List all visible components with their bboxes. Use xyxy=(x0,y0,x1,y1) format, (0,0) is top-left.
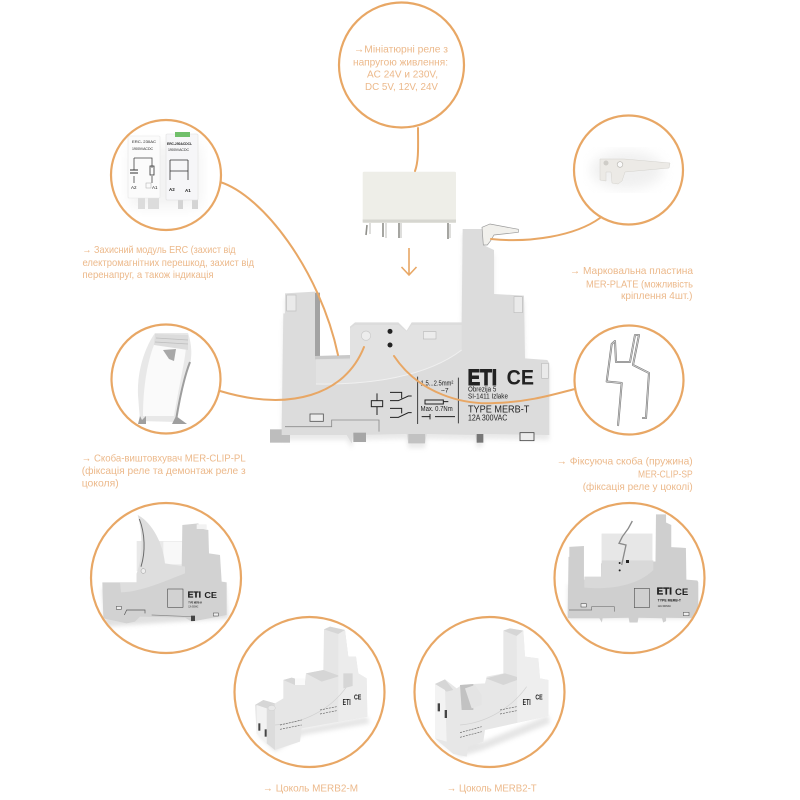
arrow: relay into socket xyxy=(402,248,416,275)
socket markings: ETI xyxy=(468,365,497,390)
callout circle: MERB2-M socket: CE xyxy=(354,692,361,701)
callout circle: ERC protection modules: A2 xyxy=(169,187,175,192)
text: MER-PLATE xyxy=(570,265,693,302)
socket body xyxy=(270,224,549,448)
callout circle: MERB2-T socket: CE xyxy=(535,692,543,701)
text: ERC protection module: електромагнітних перешкод, захист від xyxy=(82,257,254,269)
text: ERC protection module: → Захисний модуль ERC (захист від xyxy=(82,244,236,256)
callout circle: MERB2-M socket: ETI xyxy=(343,698,351,707)
callout circle: miniature relay text xyxy=(339,2,464,128)
callout circle: MER-PLATE marking plate xyxy=(574,116,683,224)
callout circle: ERC protection modules xyxy=(111,120,221,230)
text: MERB2-T: → Цоколь MERB2-T xyxy=(447,782,537,794)
callout circle: ERC protection modules: 1900V/ACDC xyxy=(132,147,154,151)
wiring schematic xyxy=(371,377,458,424)
callout circle: ERC protection modules: A1 xyxy=(185,188,191,193)
callout circle: MERB2-M socket xyxy=(234,617,384,767)
callout circle: socket with spring fitted: TYPE MERB-T xyxy=(658,599,681,603)
callout circle: socket with spring fitted xyxy=(554,503,704,653)
callout circle: socket with spring fitted: CE xyxy=(675,587,688,597)
callout circle: socket with clip fitted: CE xyxy=(204,590,217,600)
callout circle: ERC protection modules: ERC- 230AC xyxy=(132,139,156,144)
text: MER-CLIP-PL: цоколя) xyxy=(82,478,119,490)
callout circle: ERC protection modules: ERC-250ACDCL xyxy=(167,141,192,146)
socket markings: ~7 xyxy=(441,387,449,394)
text: MER-CLIP-SP: MER-CLIP-SP xyxy=(638,468,693,480)
text: MER-CLIP-PL: (фіксація реле та демонтаж реле з xyxy=(82,465,246,477)
icon: spring wire xyxy=(607,335,649,426)
socket markings xyxy=(421,365,534,423)
text: MER-PLATE: → Марковальна пластина xyxy=(570,265,693,277)
socket markings: SI-1411 Izlake xyxy=(468,393,508,400)
connector lines xyxy=(220,128,600,403)
text: MER-CLIP-SP: (фіксація реле у цоколі) xyxy=(583,481,693,493)
text: ERC protection module xyxy=(82,244,254,281)
text: miniature relay voltages: DC 5V, 12V, 24V xyxy=(365,81,438,93)
text: miniature relay voltages: →Мініатюрні реле з xyxy=(354,44,448,56)
callout circle: MER-CLIP-SP spring xyxy=(574,326,684,434)
marking plate on tower xyxy=(482,224,518,245)
text: ERC protection module: перенапруг, а також індикація xyxy=(82,269,214,281)
callout circle: socket with clip fitted: 12A 300VAC xyxy=(188,605,198,609)
callout circle: ERC protection modules: A1 xyxy=(152,185,158,190)
callout circle: ERC protection modules: 1900V/ACDC xyxy=(168,148,190,152)
text: MER-PLATE: кріплення 4шт.) xyxy=(621,290,692,302)
text: MER-CLIP-PL xyxy=(82,452,246,490)
text: MERB2-M: → Цоколь MERB2-M xyxy=(263,782,358,794)
socket markings: 12A 300VAC xyxy=(468,413,507,423)
main relay socket MERB-T with relay above xyxy=(270,172,549,448)
callout circle: socket with clip fitted: ETI xyxy=(188,590,201,600)
socket markings: TYPE MERB-T xyxy=(468,405,529,416)
text: miniature relay voltages xyxy=(353,44,448,93)
text: miniature relay voltages: AC 24V и 230V, xyxy=(367,68,438,80)
socket details: clips, holes and slots xyxy=(285,295,548,443)
socket markings: Obrezija 5 xyxy=(468,386,496,393)
callout circle: socket with spring fitted: ETI xyxy=(657,587,672,598)
callout circle: ERC protection modules: A2 xyxy=(131,185,137,190)
callout circle: MER-CLIP-PL clip xyxy=(112,324,220,434)
socket markings: 1.5...2.5mm² xyxy=(421,381,454,388)
socket markings: CE xyxy=(507,366,534,390)
miniature relay xyxy=(363,172,456,239)
text: MER-CLIP-SP: → Фіксуюча скоба (пружина) xyxy=(557,456,693,468)
callout circle: MERB2-T socket xyxy=(414,617,564,767)
callout circle: socket with clip fitted xyxy=(91,503,241,653)
text: MER-CLIP-PL: → Скоба-виштовхувач MER-CLIP-PL xyxy=(82,452,246,464)
callout circle: MERB2-T socket: ETI xyxy=(523,698,531,707)
text: MER-CLIP-SP xyxy=(557,456,693,493)
callout circle: socket with clip fitted: TYPE MERB-M xyxy=(188,601,202,605)
callout circle: socket with spring fitted: 12A 300VAC xyxy=(658,604,671,608)
infographic canvas xyxy=(82,1,706,794)
text: MER-PLATE: MER-PLATE (можливість xyxy=(586,278,693,290)
socket markings: Max. 0.7Nm xyxy=(421,406,453,413)
text: miniature relay voltages: напругою живлення: xyxy=(353,56,448,68)
